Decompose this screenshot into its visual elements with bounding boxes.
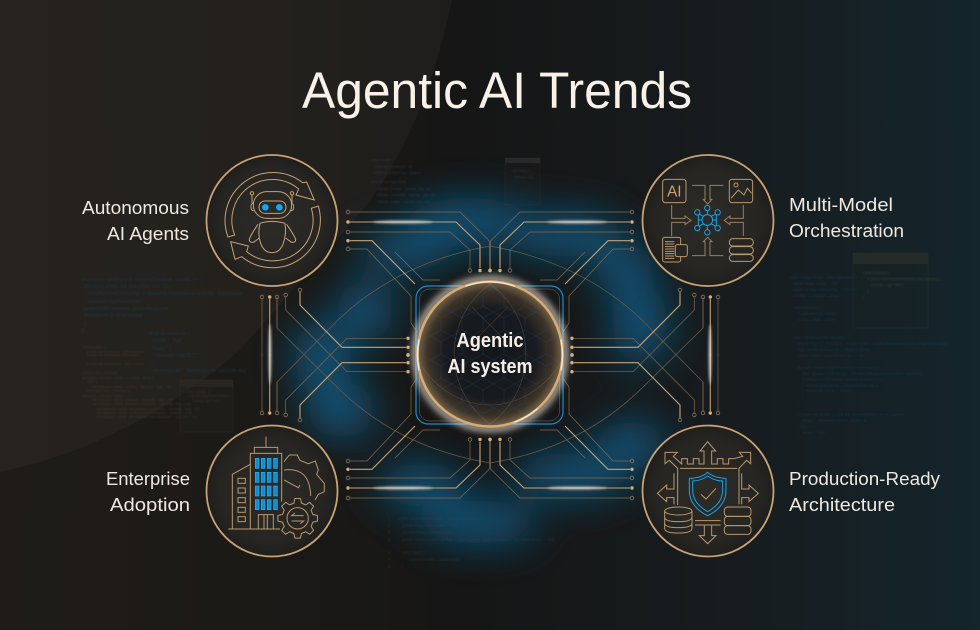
blurred code: right: float distanceToEnemy = Vector3.Distance(transform.position); bbox=[802, 371, 923, 376]
database bbox=[665, 507, 692, 533]
blurred code: left: } bbox=[84, 321, 86, 327]
code panel: top center: const val sessionType: Session bbox=[374, 171, 421, 175]
code: bottom center: 8 bbox=[388, 564, 391, 569]
code panel: right: if (Input.GetKeyDown(KeyCode.Space)) { bbox=[867, 276, 941, 281]
code panel: top center: fallback: outline - specific, 1dp, 1dp bbox=[377, 200, 430, 204]
blurred code: right: private Transform target; bbox=[793, 293, 841, 298]
blurred code: right: if (distanceToEnemy < shortestDistance) { bbox=[802, 377, 884, 382]
label: Multi-Model Orchestration bbox=[789, 194, 904, 241]
blurred code: left: localStore.js id in global; bbox=[84, 313, 145, 319]
blurred code: left gold listing: constructor: Android bbox=[82, 370, 118, 375]
blurred code: left gold listing: val fallback.name: primary-container - specific: 1dp, 1dp bbox=[92, 401, 192, 406]
label: Autonomous AI Agents: AI Agents bbox=[107, 223, 189, 244]
code: bottom center: } bbox=[402, 564, 404, 569]
code: bottom center: 1 bbox=[388, 516, 391, 521]
node ring bbox=[418, 282, 562, 426]
blurred code: right: float shortestDistance = Mathf.Infinity; bbox=[797, 347, 870, 352]
blurred code: right: nearestEnemy = enemy; bbox=[806, 388, 854, 393]
icon: robot with cycle arrows bbox=[206, 155, 338, 286]
code panel: top center: void Run() { bbox=[511, 169, 530, 173]
badge ring bbox=[642, 155, 774, 286]
code: bottom center: void Start() { bbox=[402, 550, 427, 555]
blurred code: right: // Now rotate turrets bbox=[797, 317, 836, 322]
label: Enterprise Adoption bbox=[106, 468, 190, 515]
code panel: left: DebugLog("True"); bbox=[192, 399, 222, 403]
code: bottom center: 6 bbox=[388, 550, 391, 555]
code: bottom center: 7 bbox=[388, 557, 391, 562]
blurred code: left gold listing: const val versionId: JDK/Version bbox=[87, 349, 144, 354]
icon: enterprise building with gears bbox=[206, 426, 338, 556]
side arrows bbox=[657, 473, 674, 504]
code panel: right: void Update() { bbox=[863, 270, 890, 275]
code: bottom center bbox=[388, 516, 555, 569]
code panel: right: Debug.Log("Test"); bbox=[871, 282, 905, 287]
blurred code: left: "console.log('$1');" bbox=[154, 353, 200, 359]
node hex texture bbox=[419, 283, 561, 425]
blurred code: right: } bbox=[797, 399, 799, 404]
blurred code: left: float in console { bbox=[149, 331, 190, 337]
code panel: top center: class Handler bbox=[371, 158, 392, 162]
label: Autonomous AI Agents bbox=[82, 197, 189, 244]
blurred code: left gold listing: val fallback.name: outline-low-container - specific: 1dp bbox=[96, 410, 193, 415]
blue glow cloud bbox=[294, 198, 668, 544]
blurred code: right: FindNearestEnemy(); bbox=[797, 311, 839, 316]
code panel: right: } bbox=[863, 294, 865, 299]
blurred code: right: void Update() { bbox=[793, 305, 823, 310]
badge ring bbox=[206, 155, 338, 286]
blurred code: left gold listing: dynamic: product.name, product: -false { bbox=[82, 375, 154, 380]
code: bottom center: public class BaseHealth : MonoBehaviour { bbox=[397, 516, 481, 521]
blurred code: left gold listing bbox=[82, 344, 201, 419]
code: bottom center: private float currentHealth; bbox=[402, 530, 454, 535]
blurred code: left: "prefix": "log", bbox=[151, 338, 185, 344]
code panel: left: code-handler { bbox=[186, 390, 210, 394]
database stack bbox=[729, 239, 753, 261]
down arrow bbox=[695, 521, 721, 544]
blurred code: right: shortestDistance = distanceToEnemy; bbox=[806, 383, 880, 388]
blurred code: left gold listing: val fallback.name: secondary-container - specific: 1dp, 1dp bbox=[96, 406, 201, 411]
traces: upper right bbox=[488, 210, 720, 372]
code panel: top center: const val maxResult = 40 bbox=[374, 165, 412, 169]
blurred code: right: } else { bbox=[797, 424, 811, 429]
label: Multi-Model Orchestration: Orchestration bbox=[789, 220, 904, 241]
network node bbox=[695, 205, 720, 235]
blurred code: right: target = nearestEnemy.transform; bbox=[802, 418, 867, 423]
trace highlights bbox=[269, 221, 711, 489]
blurred code: right: } bbox=[797, 436, 799, 441]
blurred code: left gold listing: class public { bbox=[82, 344, 106, 349]
label: Multi-Model Orchestration: Multi-Model bbox=[789, 194, 893, 215]
code panel: top center bbox=[371, 158, 540, 205]
node label: Agentic bbox=[456, 330, 524, 352]
blurred code: left bbox=[81, 277, 248, 382]
blurred code: right: if (nearestEnemy != null && shortestDistance <= range) { bbox=[797, 412, 908, 417]
label: Production-Ready Architecture: Production-Ready bbox=[789, 468, 941, 489]
background lighter curved shape bbox=[0, 0, 452, 472]
blurred code: left gold listing: val fallback.name: on-outline-low-container - specific: 1dp bbox=[96, 414, 198, 419]
document bbox=[663, 237, 687, 262]
blurred code: left gold listing: const val versionNo: SDK.model bbox=[87, 361, 144, 366]
label: Production-Ready Architecture bbox=[789, 468, 941, 515]
blurred code: right: } bbox=[802, 394, 804, 399]
central node: Agentic AI system bbox=[407, 271, 573, 437]
blurred code: right: public float range = 10f; bbox=[793, 281, 839, 286]
circuit traces bbox=[260, 210, 720, 500]
code panel: left: if (trueCheckIsInChildren) { bbox=[189, 394, 233, 398]
label: Enterprise Adoption: Enterprise bbox=[106, 468, 190, 489]
blurred code: left gold listing: dynamic: product.name bbox=[82, 393, 124, 398]
code panel: top center: fallback: primary - specific, 1dp, 1dp bbox=[377, 187, 431, 191]
code: bottom center: public string healthBarTag = "damageUI"; float damage = 10; float range = 100; bbox=[402, 537, 555, 542]
robot bbox=[249, 192, 296, 253]
blurred code: left gold listing: val fallback.name: outline - specific: 1dp, 1dp bbox=[92, 384, 172, 389]
blurred code: left: if(eventListNo && eventNo === 1) { bbox=[84, 284, 171, 290]
code: bottom center: 2 bbox=[388, 523, 391, 528]
blurred code: left gold listing: val fallback.name: primary - specific: 1dp, 1dp bbox=[92, 397, 174, 402]
label: Enterprise Adoption: Adoption bbox=[110, 494, 190, 515]
blurred code: right: public string enemyTag = "Enemy"; bbox=[793, 287, 861, 292]
blurred code: left gold listing: const val versionId: AIModelId bbox=[87, 352, 140, 357]
shield bbox=[689, 472, 726, 516]
icon: multi-model orchestration bbox=[642, 155, 774, 286]
blurred code: left: sendSystemDefault(); // Returns dispatches register dispatcher bbox=[87, 291, 243, 297]
server stack bbox=[724, 507, 751, 534]
code panel: left bbox=[180, 380, 233, 432]
blurred code: left: handleAddListeners.getSettings.set bbox=[81, 306, 169, 312]
blurred code: left gold listing: product.class (container) bbox=[87, 388, 131, 393]
traces: lower left bbox=[260, 338, 492, 500]
blurred code: right: target = null; bbox=[802, 430, 826, 435]
blurred code: left: document.addEventListener(function, event) => { bbox=[81, 277, 202, 283]
building bbox=[228, 437, 282, 529]
code panel: top center: fallback: secondary - specific, 1dp, 1dp bbox=[377, 193, 436, 197]
label: Autonomous AI Agents: Autonomous bbox=[82, 197, 189, 218]
code panel: right bbox=[853, 253, 941, 328]
large gear bbox=[284, 455, 324, 500]
blurred code: left: }); bbox=[81, 328, 87, 334]
node label: AI system bbox=[448, 356, 532, 378]
blurred code: right bbox=[789, 275, 948, 441]
code panel: right: } bbox=[867, 288, 869, 293]
blurred code: right: void FindNearestEnemy() { bbox=[793, 335, 846, 340]
traces: lower right bbox=[488, 338, 720, 500]
code panel: top center: Debug.Log(); bbox=[514, 175, 534, 179]
badge ring bbox=[642, 426, 774, 556]
badge ring bbox=[206, 426, 338, 556]
blurred code: left gold listing: from { bbox=[87, 379, 98, 384]
icon: production-ready architecture bbox=[642, 426, 774, 556]
blurred code: right: } bbox=[793, 323, 795, 328]
inbound arrows bbox=[672, 185, 743, 256]
blurred code: right: public class Timer : MonoBehaviour { bbox=[789, 275, 862, 280]
traces: upper left bbox=[260, 210, 492, 372]
blurred code: left: "body": [ bbox=[151, 346, 172, 352]
code: bottom center: currentHealth = maxHealth; bbox=[408, 557, 462, 562]
blurred code: left: consoleLog('functions'); bbox=[87, 299, 146, 305]
blurred code: left: ], bbox=[151, 361, 155, 367]
label: Production-Ready Architecture: Architecture bbox=[789, 494, 895, 515]
blue windows bbox=[255, 458, 277, 510]
node disc bbox=[417, 281, 563, 427]
blurred code: left: "description": "Message to console log" bbox=[151, 368, 248, 374]
castle arrows bbox=[665, 442, 751, 505]
code: bottom center: 3 bbox=[388, 530, 391, 535]
code: bottom center: 4 bbox=[388, 537, 391, 542]
code panel: top center: dynamic: product.name bbox=[371, 180, 406, 184]
node label bbox=[448, 330, 532, 378]
node glow bbox=[415, 279, 565, 429]
blurred code: right: GameObject[] enemies = GameObject.FindGameObjectsWithTag(enemyTag); bbox=[797, 341, 948, 346]
blurred code: left: } bbox=[149, 376, 151, 382]
eye-shaped arcs bbox=[277, 246, 703, 463]
blurred code: right: GameObject nearestEnemy = null; bbox=[797, 353, 864, 358]
blurred code: right: foreach (GameObject enemy in enemies) { bbox=[797, 365, 881, 370]
image box bbox=[729, 179, 753, 203]
title: Agentic AI Trends bbox=[302, 62, 692, 119]
code: bottom center: public float maxHealth = 100; bbox=[402, 523, 459, 528]
check mark bbox=[701, 488, 716, 499]
cycle arrows bbox=[225, 172, 320, 268]
ring highlights bbox=[417, 282, 563, 422]
AI box: AI bbox=[667, 184, 682, 201]
central chip frame bbox=[416, 286, 563, 424]
small gear bbox=[278, 499, 317, 538]
